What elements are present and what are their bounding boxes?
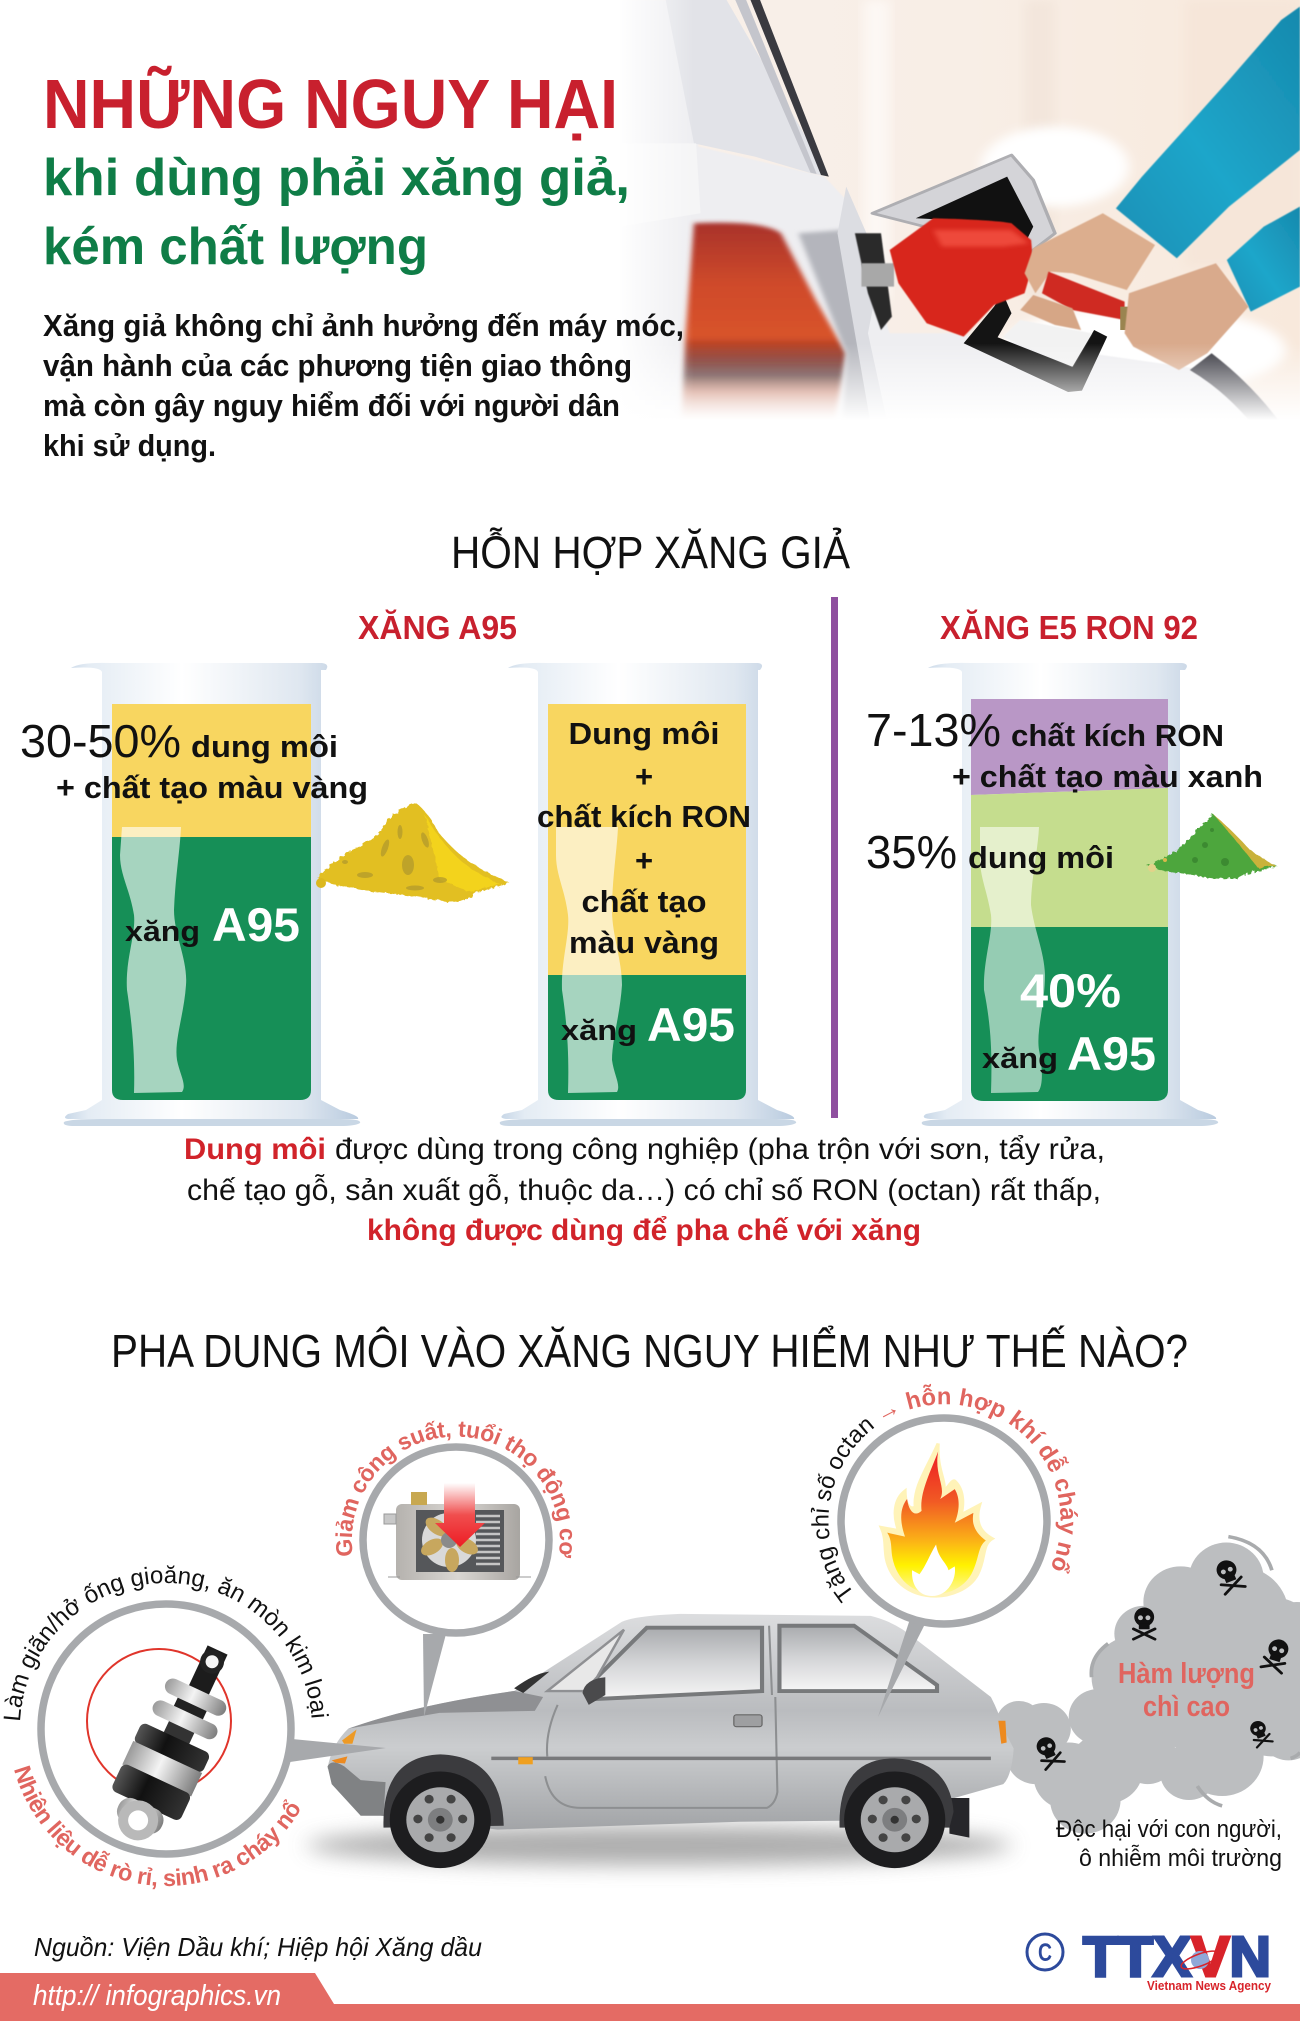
front wheel [390,1771,491,1868]
label: 7-13% RON booster: 7-13% [866,704,1001,756]
label: 30-50% solvent [20,715,368,805]
label: A95 petrol: xăng [561,1015,637,1047]
title: khi dùng phải xăng giả, [43,149,630,207]
label: lead content [1118,1658,1255,1723]
title [43,65,630,276]
explanatory note on solvents: không được dùng để pha chế với xăng [367,1214,921,1247]
label: 35% solvent: dung môi [968,840,1114,875]
intro text: vận hành của các phương tiện giao thông [43,348,632,383]
label: A95 petrol: A95 [212,898,300,951]
curved text: corrosion: Làm giãn/hở ống gioăng, ăn mòn kim loại [4,1565,329,1720]
heading: A95: XĂNG A95 [358,609,517,646]
intro text [43,308,684,463]
intro text: khi sử dụng. [43,428,216,463]
label: A95 petrol: xăng [125,916,200,948]
label: toxic effects: Độc hại với con người, [1056,1816,1282,1843]
rear wheel [844,1771,945,1868]
label: 7-13% RON booster: chất kích RON [1011,718,1224,753]
cylinder 2: A95 [500,663,796,1126]
label: 35% solvent: 35% [866,826,957,878]
icon: down arrow [435,1483,485,1547]
curved text: leak and fire risk: Nhiên liệu dễ rò rỉ, sinh ra cháy nổ [14,1766,300,1890]
title: kém chất lượng [43,218,428,276]
heading: E5 RON 92: XĂNG E5 RON 92 [940,609,1198,646]
label: 30-50% solvent: dung môi [191,729,338,764]
logo: TTXVN: TTXVN [1083,1925,1271,1989]
label: 7-13% RON booster [866,704,1263,794]
label: 40% A95 petrol: 40% [1020,964,1121,1017]
icon: flame [881,1444,992,1596]
label: 7-13% RON booster: + chất tạo màu xanh [952,759,1263,794]
logo: TTXVN: Vietnam News Agency [1147,1978,1272,1993]
label: A95 petrol [125,898,300,951]
callout: flame circle [841,1418,1047,1717]
label: 30-50% solvent: 30-50% [20,715,181,767]
curved text: reduced engine power: Giảm công suất, tuổi thọ động cơ [335,1420,572,1558]
icon: yellow powder [316,803,510,902]
icon: engine radiator and fan [384,1483,531,1580]
label: solvent + RON booster + yellow dye: chất tạo [582,884,706,919]
label: solvent + RON booster + yellow dye [537,716,751,960]
intro text: mà còn gây nguy hiểm đối với người dân [43,388,620,423]
cylinder 3: E5 RON 92 [866,663,1263,1126]
label: toxic effects [1056,1816,1282,1872]
title: NHỮNG NGUY HẠI [43,65,618,143]
cylinder 1: A95 [20,663,368,1126]
label: solvent + RON booster + yellow dye: + [635,843,653,878]
explanatory note on solvents: chế tạo gỗ, sản xuất gỗ, thuộc da…) có chỉ số RON (octan) rất thấp, [187,1174,1101,1207]
heading: fake fuel mixture: HỖN HỢP XĂNG GIẢ [451,527,850,578]
label: lead content: Hàm lượng [1118,1658,1255,1690]
explanatory note on solvents: được dùng trong công nghiệp (pha trộn với sơn, tẩy rửa, [335,1133,1105,1166]
logo: TTXVN: C [1038,1939,1052,1967]
icon: green powder [1147,814,1277,879]
photo: refuelling car [616,0,1300,453]
label: toxic effects: ô nhiễm môi trường [1079,1845,1282,1872]
label: A95 petrol [561,998,735,1051]
icon: shock absorber [95,1634,252,1855]
exhaust cloud [996,1537,1300,1834]
car illustration [307,1614,1014,1868]
label: solvent + RON booster + yellow dye: Dung môi [568,716,720,751]
footer band: http:// infographics.vn [33,1980,281,2012]
curved text: octan and flammable mixture: Tăng chỉ số octan → hỗn hợp khí dễ cháy nổ [810,1384,1078,1604]
label: solvent + RON booster + yellow dye: + [635,759,653,794]
label: 35% solvent [866,826,1114,878]
label: solvent + RON booster + yellow dye: chất kích RON [537,799,751,834]
skulls in exhaust [1033,1557,1292,1770]
explanatory note on solvents: Dung môi [184,1133,326,1166]
label: A95 petrol: A95 [647,998,735,1051]
label: solvent + RON booster + yellow dye: màu vàng [569,925,719,960]
label: lead content: chì cao [1143,1691,1230,1723]
label: 30-50% solvent: + chất tạo màu vàng [56,770,368,805]
explanatory note on solvents [184,1133,1105,1247]
source: Nguồn: Viện Dầu khí; Hiệp hội Xăng dầu [34,1932,482,1962]
callout: engine circle [363,1447,549,1717]
callout: left circle [41,1604,386,1855]
intro text: Xăng giả không chỉ ảnh hưởng đến máy móc, [43,308,684,343]
label: 40% A95 petrol [982,964,1156,1080]
label: 40% A95 petrol: A95 [1067,1027,1156,1080]
label: 40% A95 petrol: xăng [982,1043,1058,1075]
footer band [0,1973,1300,2021]
